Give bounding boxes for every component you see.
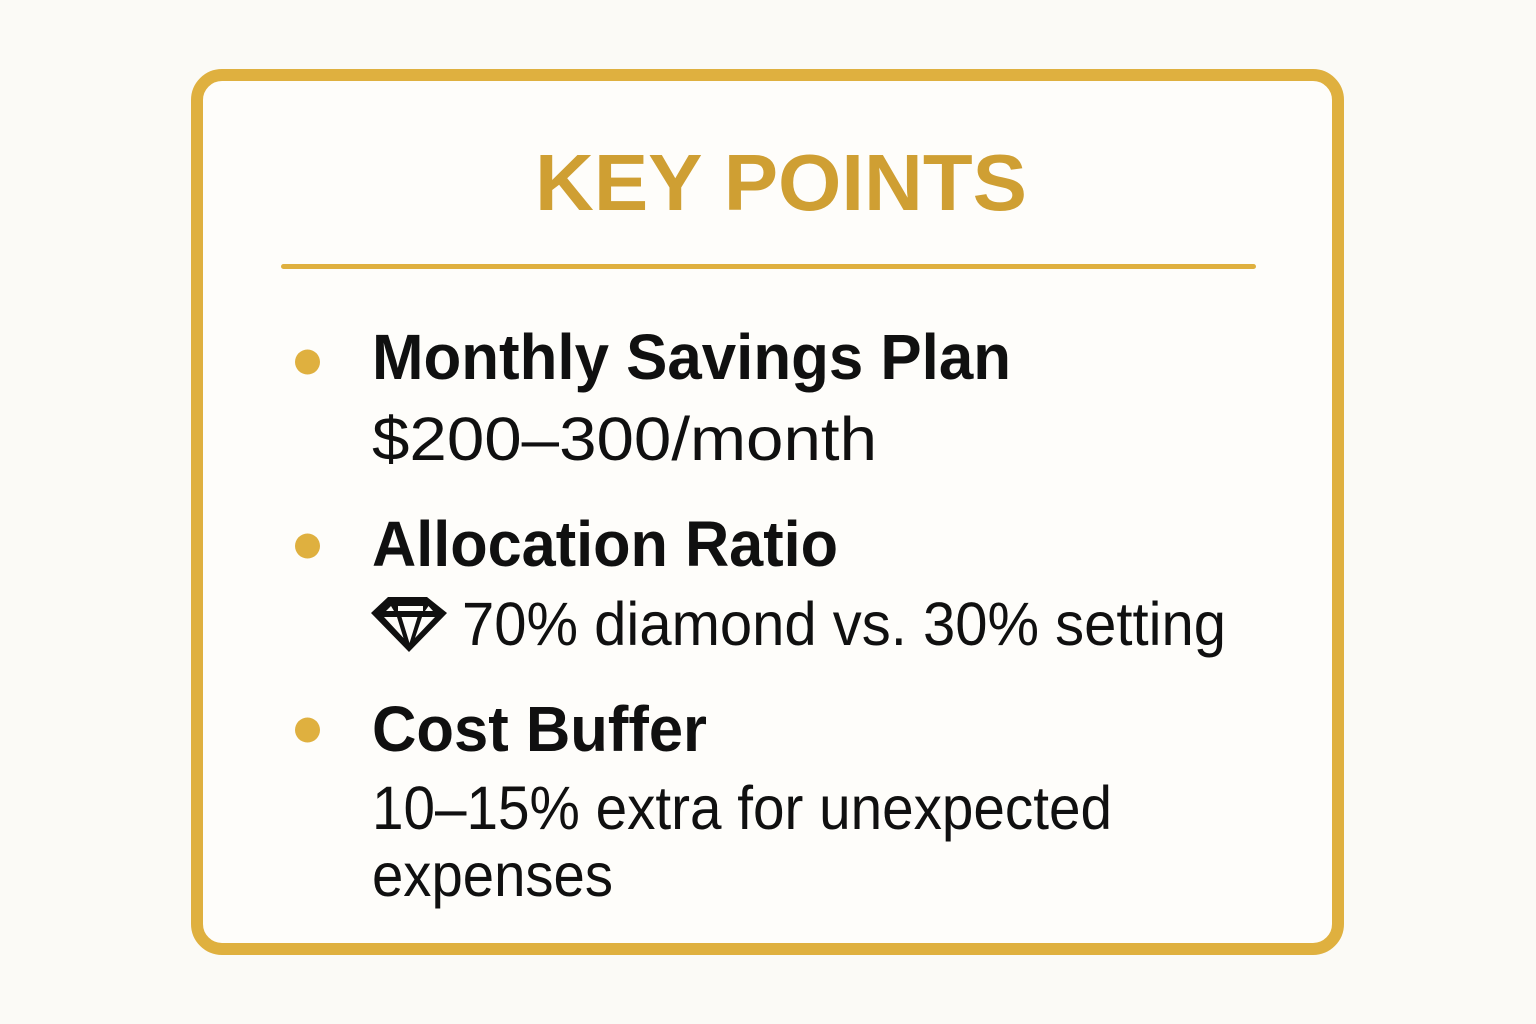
item: cost buffer — [295, 693, 1112, 909]
bullet — [295, 350, 320, 374]
panel: key points card — [197, 75, 1338, 949]
item detail: 70% diamond vs. 30% setting — [462, 590, 1226, 658]
title: KEY POINTS — [535, 138, 1027, 227]
bullet — [295, 534, 320, 558]
title divider — [281, 264, 1256, 269]
item heading: Allocation Ratio — [372, 508, 838, 580]
item heading: Cost Buffer — [372, 693, 707, 765]
item: allocation ratio — [295, 508, 1226, 658]
item detail: $200–300/month — [372, 405, 877, 473]
bullet — [295, 718, 320, 742]
item detail: 10–15% extra for unexpected — [372, 774, 1112, 842]
item heading: Monthly Savings Plan — [372, 321, 1011, 393]
item: monthly savings plan — [295, 321, 1011, 473]
icon: diamond — [371, 597, 447, 652]
item detail continuation: expenses — [372, 841, 613, 909]
